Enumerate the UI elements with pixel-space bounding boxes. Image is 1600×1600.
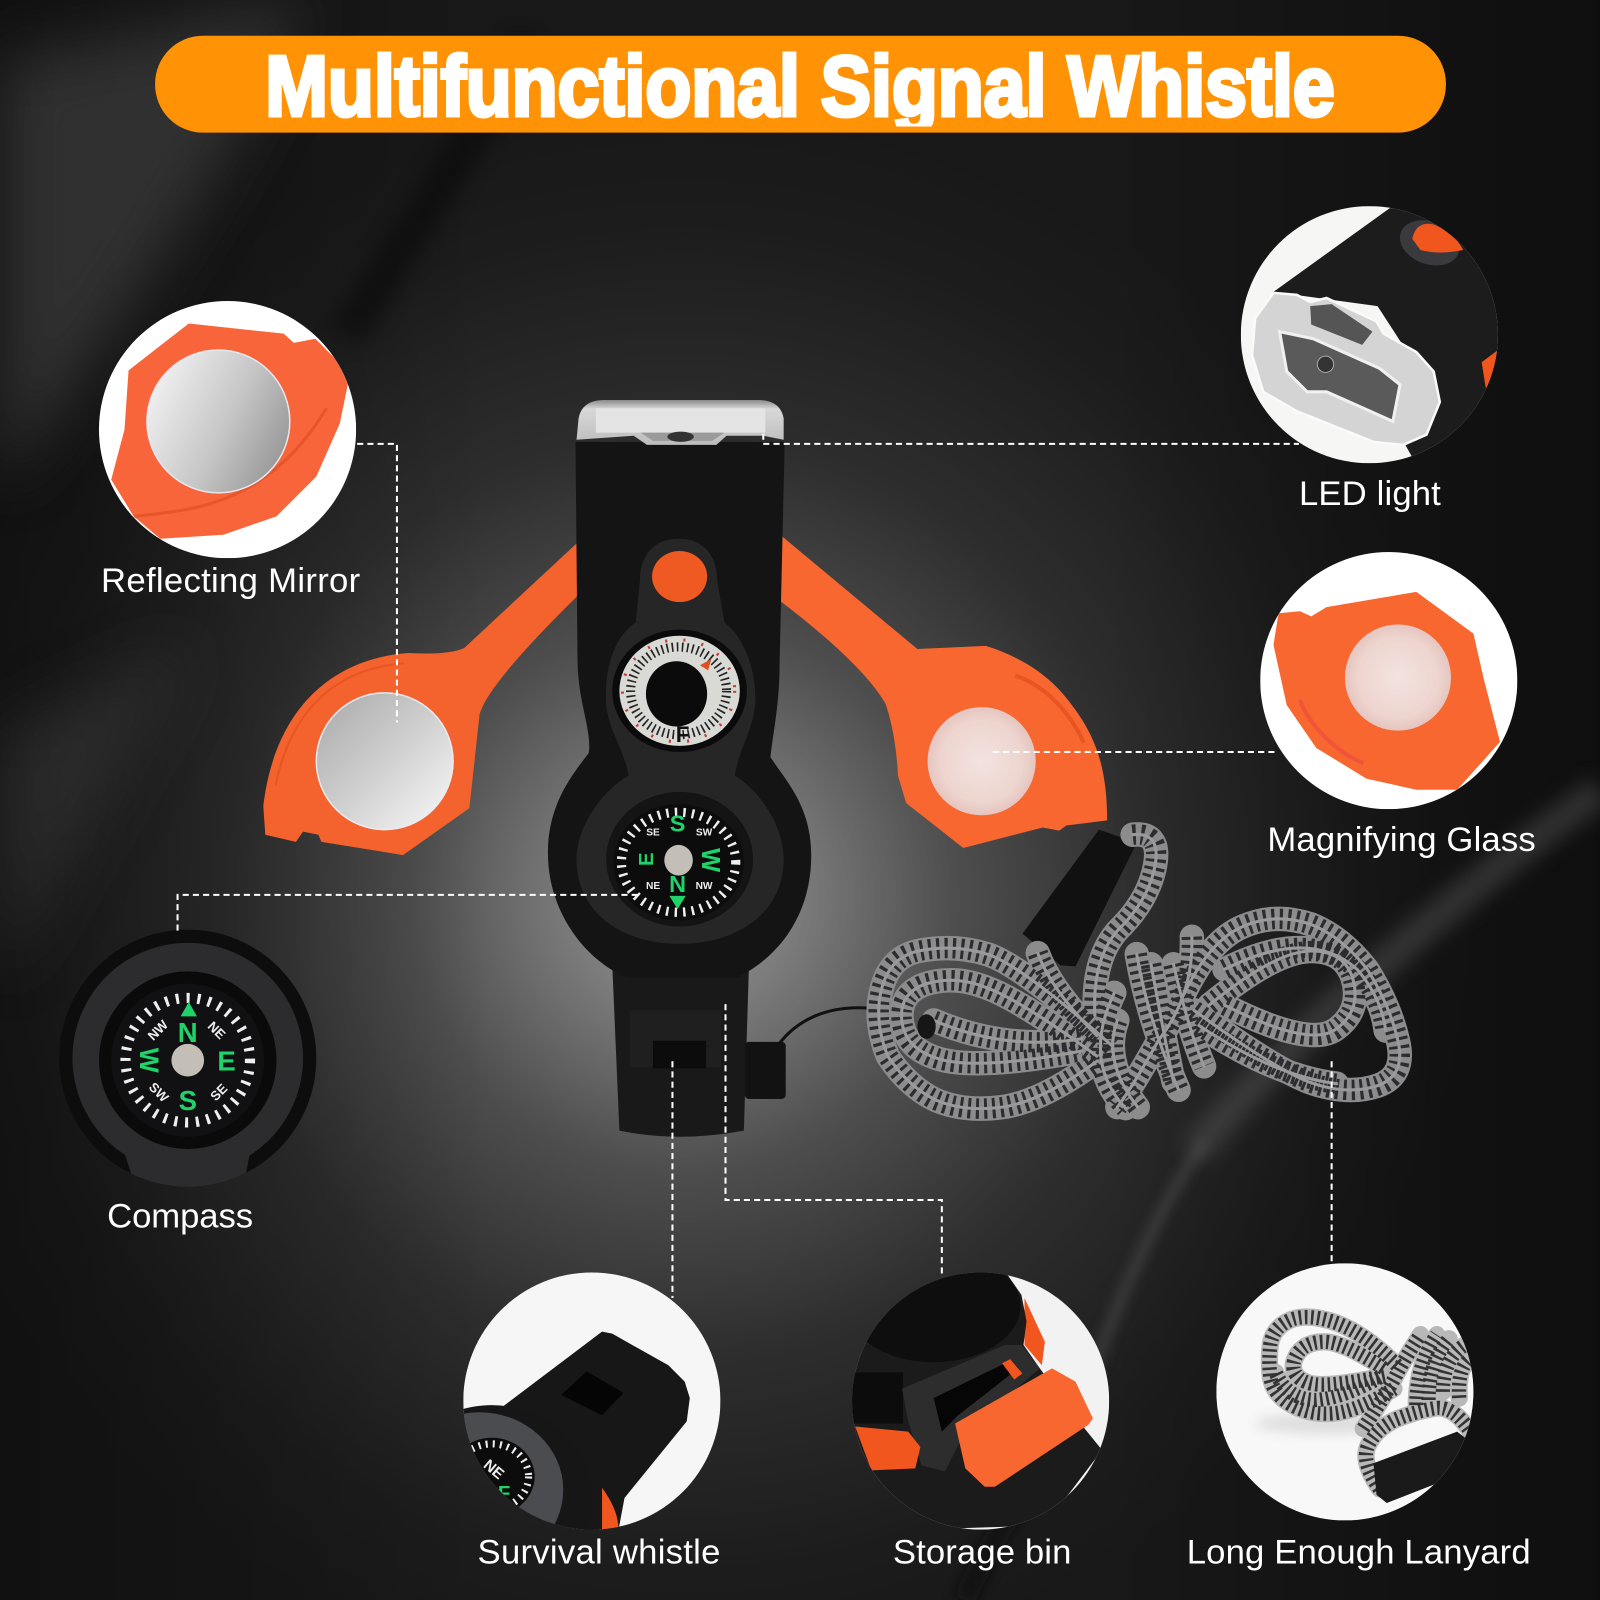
circle photo: storage (852, 1272, 1110, 1530)
arm with magnifying glass (778, 533, 1107, 848)
circle photo: compass: SW (146, 1079, 172, 1105)
circle photo: compass: NW (145, 1017, 171, 1043)
title banner: Multifunctional Signal Whistle (265, 38, 1335, 134)
lanyard clip and cord (745, 1008, 869, 1099)
circle photo: whistle: F (498, 1483, 510, 1505)
circle photo: mirror (99, 301, 356, 558)
circle photo: lanyard (1216, 1263, 1474, 1520)
product: signal whistle (263, 400, 1107, 1137)
label: Survival whistle (478, 1533, 720, 1571)
thermometer (612, 630, 747, 752)
connector (763, 434, 1299, 444)
label: Magnifying Glass (1267, 821, 1536, 859)
circle photo: compass: SE (207, 1081, 230, 1104)
power button (652, 551, 707, 602)
label: LED light (1299, 475, 1441, 513)
connector (993, 751, 1278, 753)
circle photo: compass: E (217, 1045, 236, 1076)
circle photo: compass: N (178, 1017, 198, 1048)
connector (178, 895, 638, 931)
circle photo: whistle: NE (480, 1457, 507, 1483)
compass dial: S (670, 811, 685, 837)
braided cord (879, 834, 1400, 1109)
cord lock (1022, 830, 1137, 966)
callout: LED light (763, 206, 1510, 513)
connector (357, 444, 397, 722)
main body (548, 442, 811, 978)
compass dial: E (636, 852, 658, 866)
callout: long enough lanyard (1187, 1061, 1531, 1571)
compass dial: SW (696, 828, 713, 839)
label: Storage bin (893, 1533, 1071, 1571)
compass dial: N (669, 871, 686, 897)
circle photo: LED (1241, 206, 1510, 463)
compass dial: SE (646, 828, 660, 839)
circle photo: compass: S (179, 1085, 197, 1116)
whistle lower body (612, 964, 749, 1137)
compass dial: NW (696, 881, 713, 892)
callout: reflecting mirror (99, 301, 397, 722)
connector (1331, 1061, 1333, 1263)
callout: compass (59, 895, 638, 1236)
circle photo: whistle (463, 1272, 720, 1530)
callout: magnifying glass (993, 552, 1536, 859)
compass dial (613, 804, 744, 920)
product: lanyard (879, 830, 1400, 1109)
callout: survival whistle (463, 1061, 720, 1564)
LED lens (577, 400, 784, 445)
compass dial: W (696, 848, 724, 873)
label: Long Enough Lanyard (1187, 1533, 1531, 1571)
connector (726, 1004, 942, 1276)
label: Reflecting Mirror (101, 562, 360, 600)
compass dial: NE (646, 881, 660, 892)
arm with mirror (263, 539, 582, 855)
label: Compass (107, 1198, 253, 1236)
thermometer: F (676, 722, 690, 747)
circle photo: compass: W (134, 1048, 164, 1073)
circle photo: magnifier (1260, 552, 1517, 809)
callout: storage bin (726, 1004, 1109, 1571)
connector (671, 1061, 673, 1298)
circle photo: compass: NE (205, 1018, 229, 1042)
circle photo: compass (59, 930, 316, 1187)
